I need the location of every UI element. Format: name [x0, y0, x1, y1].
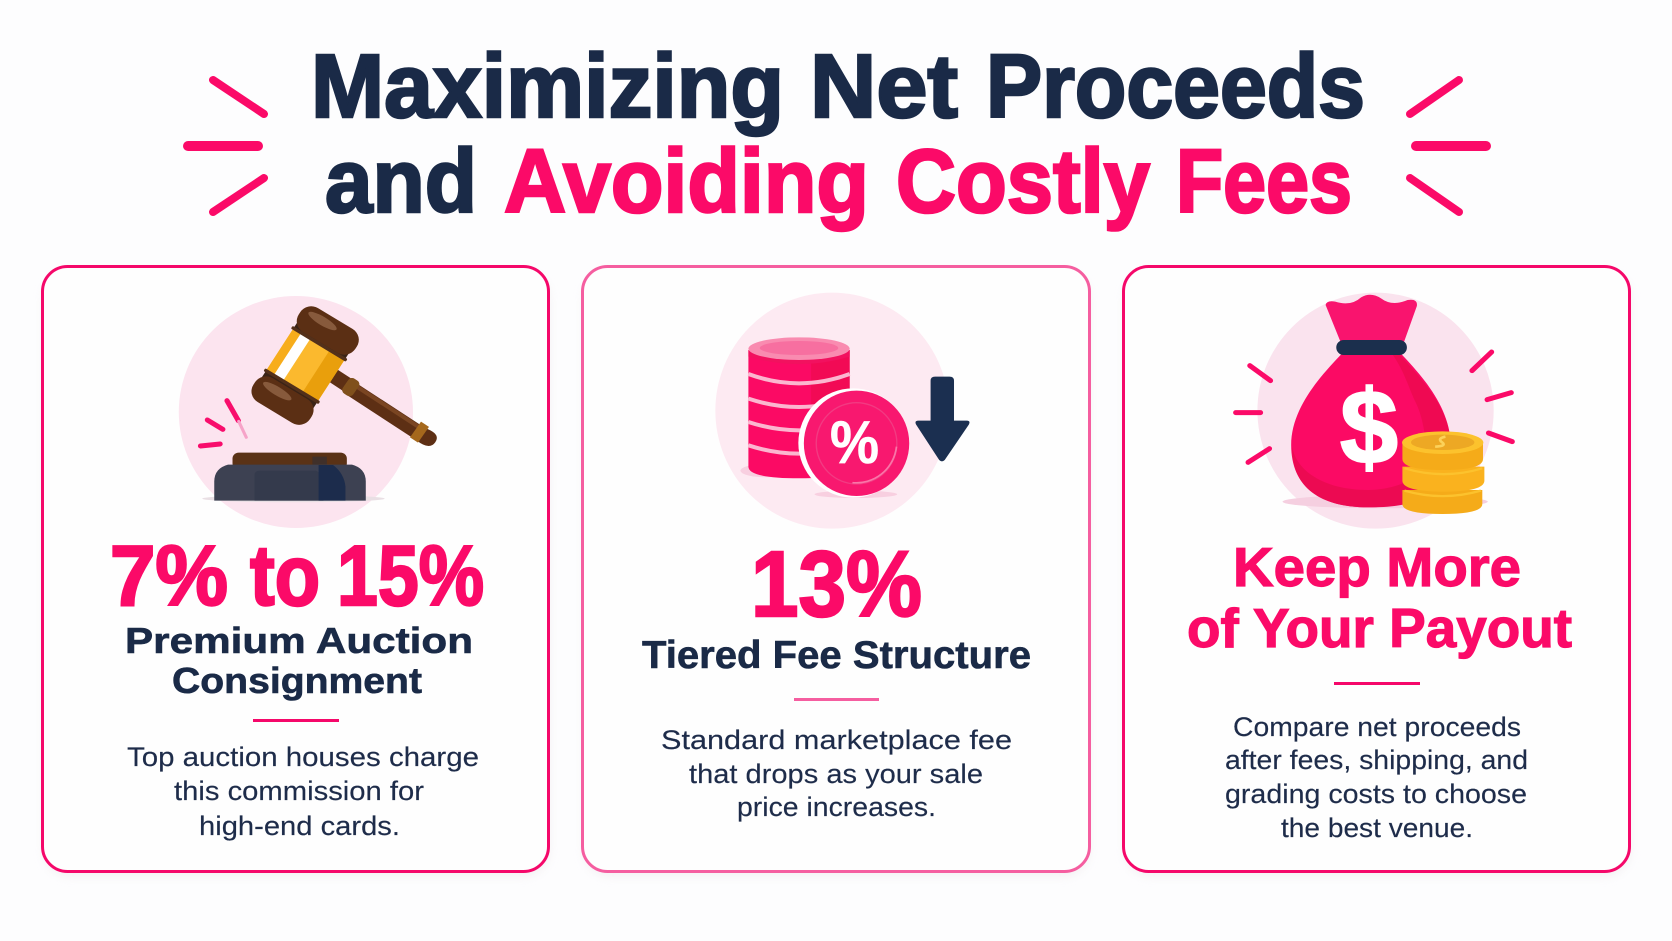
heading: keep more of your payout: Keep More [1233, 536, 1521, 598]
title: Net [810, 37, 958, 137]
text: description: Top auction houses charge [127, 742, 479, 772]
heading: premium auction consignment: Consignment [172, 660, 422, 701]
title: Avoiding [504, 132, 869, 232]
text: description: after fees, shipping, and [1225, 745, 1528, 775]
icon: money bag with coins [1236, 293, 1512, 529]
heading: premium auction consignment: Premium Auction [125, 620, 473, 661]
text: description: grading costs to choose [1225, 779, 1527, 809]
right title burst rays [1410, 80, 1486, 212]
panel: keep more of your payout [1124, 266, 1630, 876]
panel: tiered fee structure [582, 266, 1090, 876]
text: description: Standard marketplace fee [661, 725, 1012, 755]
text: description: Compare net proceeds [1233, 712, 1521, 742]
panel: premium auction consignment [42, 266, 549, 876]
text: description: the best venue. [1281, 813, 1473, 843]
title: Costly [896, 132, 1150, 232]
title: Maximizing [311, 37, 784, 137]
heading: keep more of your payout [1187, 536, 1572, 659]
heading: premium auction consignment [125, 620, 473, 701]
text: description: this commission for [174, 776, 424, 806]
text: description [661, 725, 1012, 822]
icon text: dollar sign: $ [1340, 369, 1398, 486]
left title burst rays [188, 80, 264, 212]
text: description [1225, 712, 1528, 843]
stat: 7% to 15%: 15% [337, 529, 484, 624]
text: description [127, 742, 479, 841]
icon text: percent sign: % [830, 409, 879, 476]
title: Fees [1176, 132, 1352, 232]
stat: 7% to 15% [110, 529, 484, 624]
stat: 7% to 15%: to [250, 529, 320, 624]
heading: tiered fee structure: Tiered Fee Structure [642, 634, 1031, 677]
heading: keep more of your payout: of Your Payout [1187, 597, 1572, 659]
icon: gavel [179, 296, 441, 528]
title [311, 37, 1365, 232]
text: description: price increases. [737, 792, 936, 822]
stat: 7% to 15%: 7% [110, 529, 228, 624]
stat: 13%: 13% [751, 532, 922, 636]
text: description: high-end cards. [199, 811, 400, 841]
icon: coin stack with percent and down arrow [715, 293, 970, 529]
text: description: that drops as your sale [689, 759, 983, 789]
title: Proceeds [986, 37, 1365, 137]
title: and [325, 132, 477, 232]
